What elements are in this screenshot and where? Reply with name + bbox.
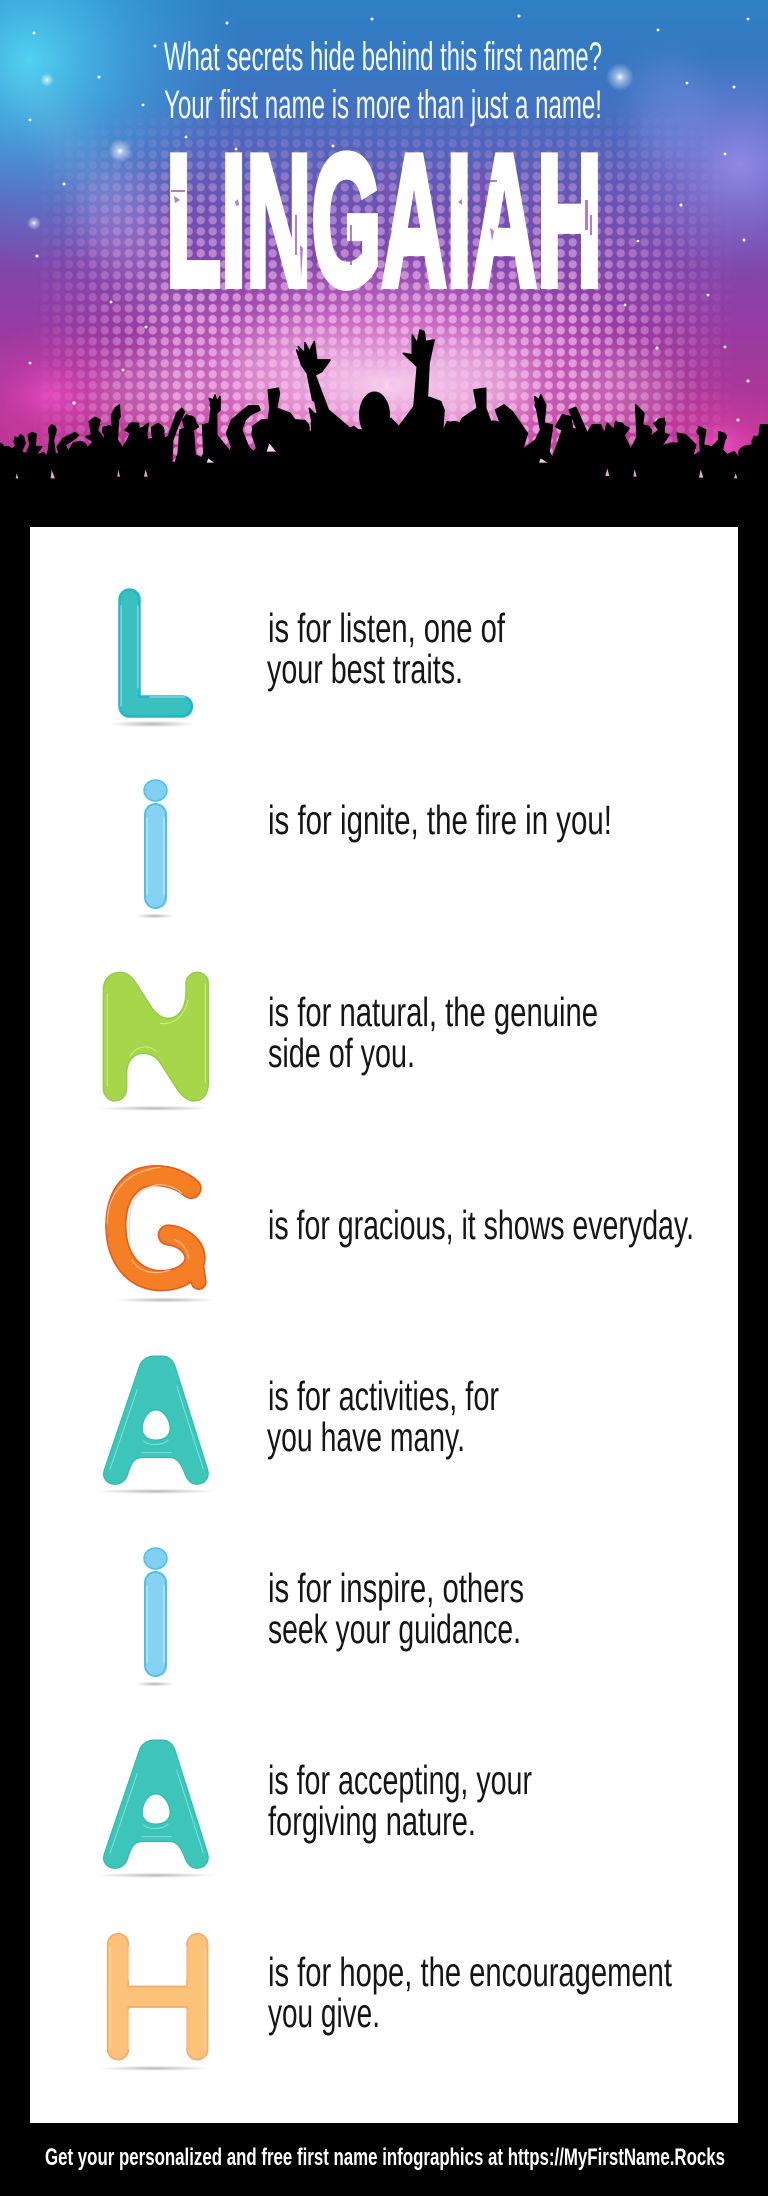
text: i lines: is for inspire, others [268, 1565, 524, 1611]
icon: letter N [98, 972, 212, 1111]
text: L line [267, 605, 505, 692]
intro text [164, 35, 602, 127]
text: A lines: forgiving nature. [268, 1798, 476, 1844]
text: A lines: is for accepting, your [268, 1757, 532, 1803]
sparkles [27, 14, 750, 422]
text: i lines [268, 1565, 524, 1652]
icon: letter i [135, 1548, 175, 1686]
text: N lines: side of you. [268, 1030, 415, 1076]
icon: letter A [93, 1356, 217, 1494]
row 7: letter A [93, 1740, 532, 1878]
main white panel [30, 527, 738, 2123]
icon: letter A [93, 1740, 217, 1878]
row 6: letter i [135, 1548, 524, 1686]
heads and fists, left half [1, 400, 309, 463]
icon: letter L [108, 600, 196, 728]
text: N lines [268, 989, 598, 1076]
icon: letter i [135, 780, 175, 918]
text: H lines: you give. [268, 1990, 380, 2036]
text: i line: is for ignite, the fire in you! [268, 797, 612, 843]
icon: letter H [98, 1944, 212, 2071]
text: L line: is for listen, one of [268, 605, 505, 651]
row 1: letter L [108, 600, 505, 728]
crowd silhouette [0, 330, 768, 530]
text: A lines [267, 1373, 499, 1460]
text: H lines [268, 1949, 672, 2036]
text: A lines: you have many. [267, 1414, 465, 1460]
header background [0, 0, 768, 462]
row 2: letter i [135, 780, 612, 918]
icon: letter G [107, 1167, 217, 1303]
row 5: letter A [93, 1356, 499, 1494]
heads and fists, right half [446, 400, 760, 465]
text: L line: your best traits. [267, 646, 463, 692]
text: N lines: is for natural, the genuine [268, 989, 598, 1035]
text: i lines: seek your guidance. [268, 1606, 521, 1652]
row 4: letter G [107, 1167, 694, 1303]
text: A lines [268, 1757, 532, 1844]
row 3: letter N [98, 972, 598, 1111]
row 8: letter H [98, 1944, 672, 2071]
text: A lines: is for activities, for [268, 1373, 499, 1419]
black lower band [0, 500, 768, 2196]
